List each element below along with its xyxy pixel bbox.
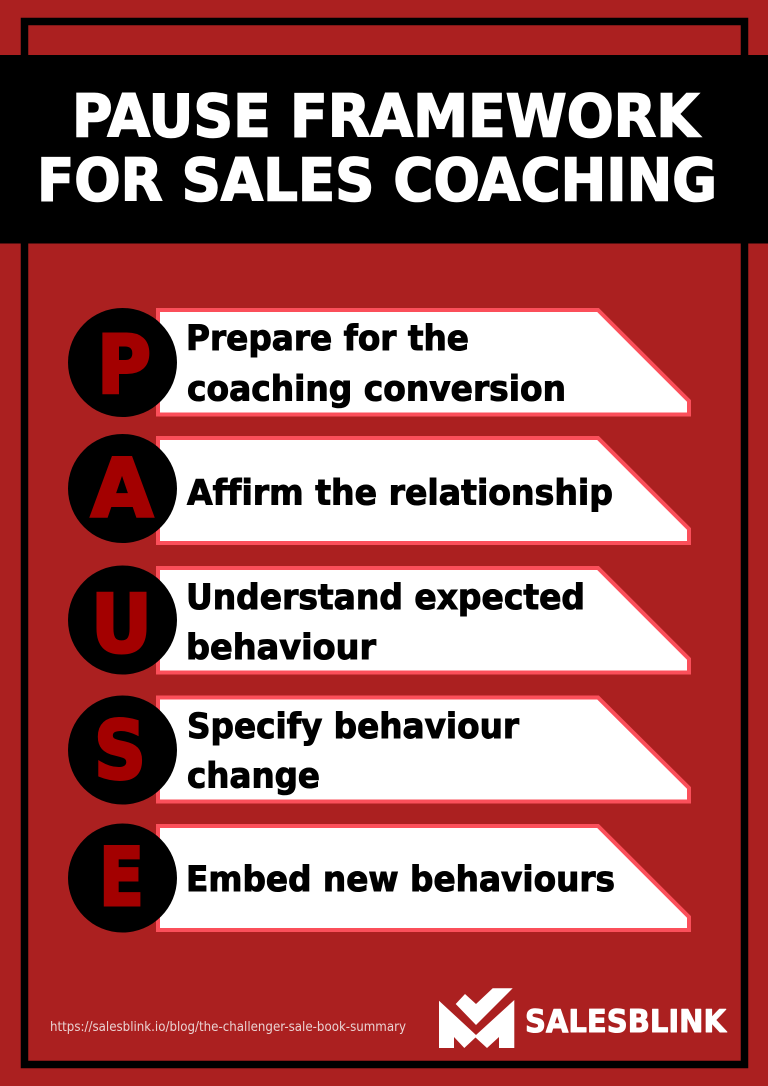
text A: Affirm the relationship <box>187 474 613 514</box>
salesblink logo <box>439 988 727 1048</box>
letter S: S <box>94 704 146 798</box>
circle P <box>68 308 177 417</box>
title line 2: FOR SALES COACHING <box>37 146 717 214</box>
banner P <box>158 310 689 414</box>
banner U <box>158 568 689 672</box>
title line 1: PAUSE FRAMEWORK <box>72 82 701 150</box>
letter U: U <box>91 578 152 671</box>
text U: Understand expected <box>186 578 585 618</box>
title banner <box>0 55 768 244</box>
row S: specify: change <box>187 756 320 796</box>
row U: understand: behaviour <box>186 628 376 668</box>
row P: prepare: coaching conversion <box>187 370 566 410</box>
text E: Embed new behaviours <box>186 860 615 900</box>
wordmark: SALESBLINK <box>525 1004 727 1040</box>
text S: Specify behaviour <box>187 707 519 747</box>
letter P: P <box>97 319 151 412</box>
row S: specify <box>68 696 689 804</box>
row A: affirm <box>68 434 689 543</box>
circle A <box>68 434 177 543</box>
row P: prepare <box>68 308 689 417</box>
text P: Prepare for the <box>186 319 469 359</box>
row U: understand <box>68 566 689 674</box>
circle E <box>68 824 177 932</box>
circle S <box>68 696 177 804</box>
banner S <box>158 698 689 802</box>
row E: embed <box>68 824 689 932</box>
letter E: E <box>99 831 144 924</box>
letter A: A <box>91 442 153 535</box>
icon: M with check mark <box>439 988 514 1048</box>
source url: https://salesblink.io/blog/the-challenger-sale-book-summary <box>50 1020 406 1035</box>
banner A <box>158 438 689 543</box>
circle U <box>68 566 177 674</box>
banner E <box>158 826 689 930</box>
